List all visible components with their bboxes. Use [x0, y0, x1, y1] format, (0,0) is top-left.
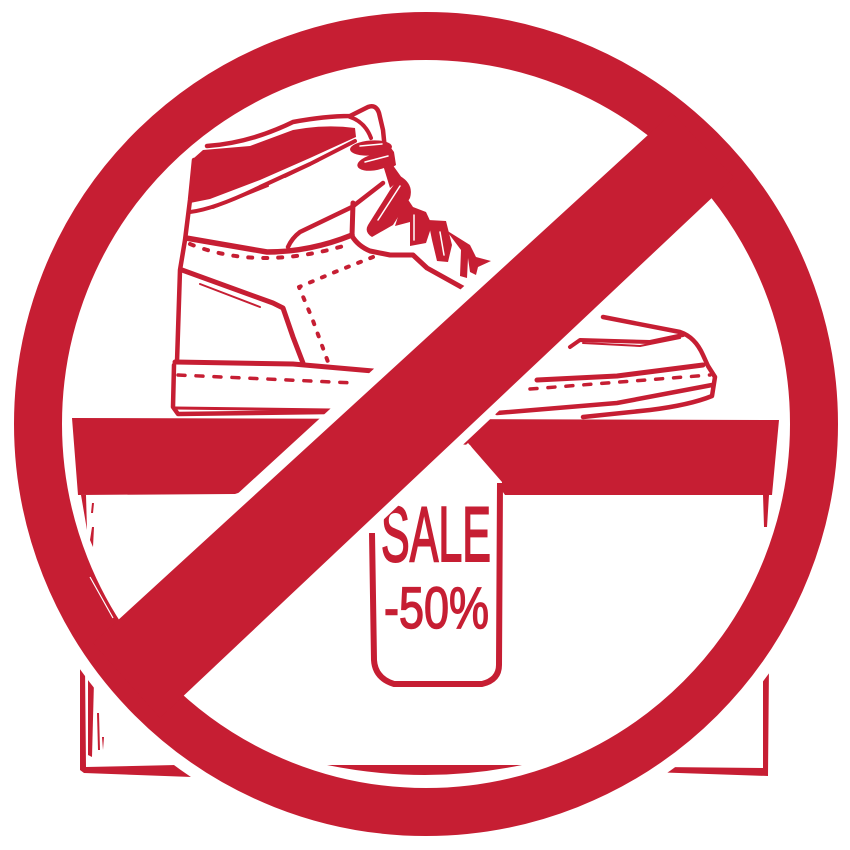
ankle panel: [186, 235, 352, 252]
sneaker: [173, 106, 715, 417]
collar upper edge and tongue: [207, 106, 385, 150]
tag text: SALE: SALE: [381, 490, 491, 578]
heel back line: [177, 160, 194, 362]
laces: [350, 139, 491, 278]
toe cap: [583, 317, 715, 417]
tag text: -50%: -50%: [384, 576, 489, 641]
shoe box lid: [72, 418, 779, 495]
collar fill: [190, 126, 356, 203]
prohibition slash: [93, 113, 734, 718]
white gap around slash: [78, 113, 747, 718]
collar lower lines: [190, 141, 355, 212]
sole heel section: [175, 362, 373, 371]
front sole: [537, 365, 703, 380]
stitching: quarter: [299, 257, 373, 362]
ring scratch highlight: [90, 577, 113, 618]
stitching: collar: [190, 244, 350, 258]
eyelet panel and throat: [352, 203, 463, 288]
shoe box outline: [80, 495, 769, 777]
sale price tag: [369, 443, 502, 688]
side panel: [182, 270, 303, 363]
